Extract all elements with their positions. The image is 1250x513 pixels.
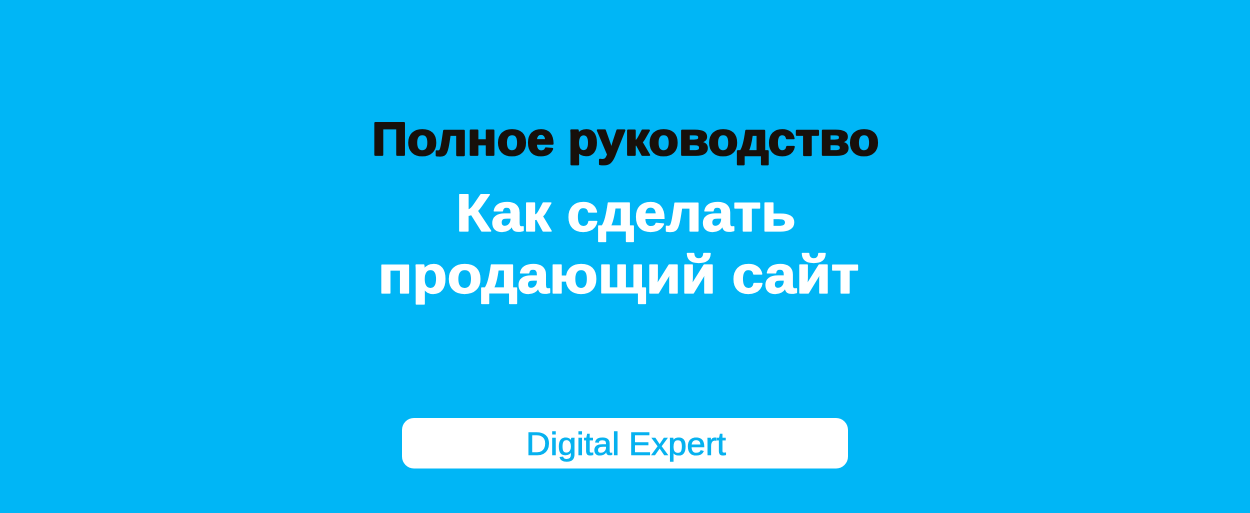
heading: full guide: Полное руководство <box>372 113 879 165</box>
title: how to make a selling site: продающий сайт <box>378 246 859 305</box>
title: how to make a selling site: Как сделать <box>456 184 796 243</box>
badge: Digital Expert: Digital Expert <box>526 426 726 462</box>
title: how to make a selling site <box>378 184 859 305</box>
badge: Digital Expert <box>402 418 848 468</box>
